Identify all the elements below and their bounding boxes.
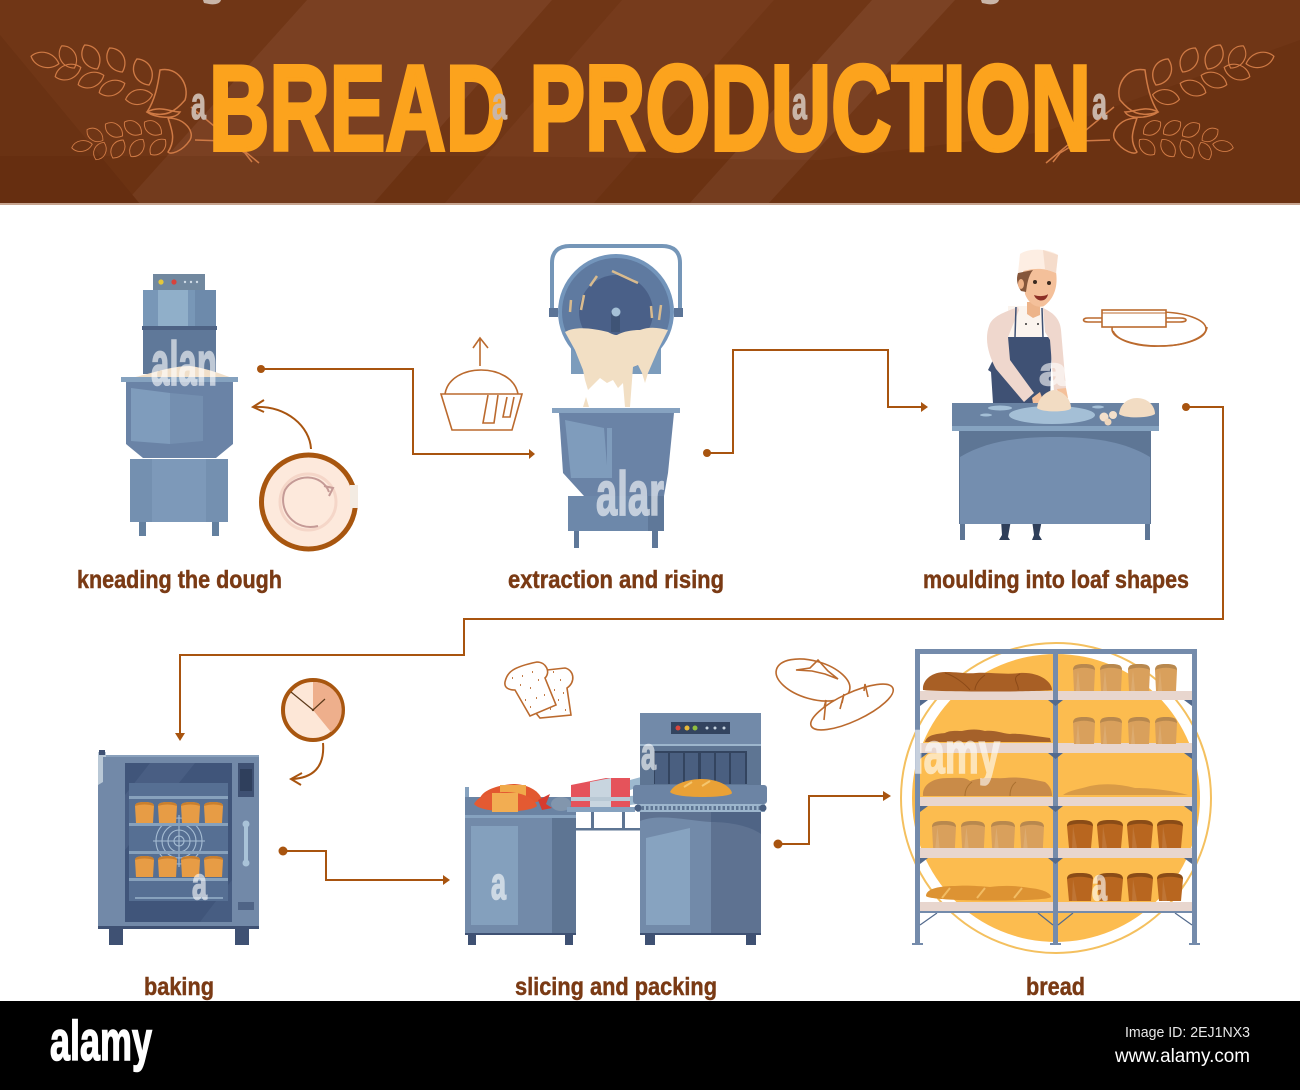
watermarks on rack [913,721,1108,910]
icon: loaf and baguette [771,651,899,739]
header banner [0,0,1300,205]
icon: rotation dial with arrow [253,400,358,549]
packed loaves [474,784,571,812]
slicing machine [633,713,767,945]
icon: wheat left [29,41,259,163]
watermark fragments in header [191,0,1107,129]
rack frame [912,649,1200,945]
connector: extraction to moulding [703,350,928,457]
watermark fragments in header: a [1092,77,1107,129]
watermark fragments in header: a [191,77,206,129]
icon: bread slices [505,662,573,718]
label: slicing and packing: slicing and packing [515,973,717,1001]
work table [952,403,1159,540]
step 3: baker at table: a [1039,350,1068,394]
left cabinet [465,787,576,945]
watermarks on rack: lamy [913,721,1000,786]
step 4: oven [98,750,259,945]
label: bread: bread [1026,973,1085,1001]
baker body [987,250,1068,409]
icon: rolling pin and board [1084,310,1207,346]
connector: slicing to bread [774,791,891,848]
watermarks on rack: a [1092,859,1108,910]
connector: baking to slicing [278,846,450,885]
watermark fragments in header: a [492,77,507,129]
step 2: extraction machine [549,246,683,548]
connector: kneading to extraction [257,365,535,459]
breads row 4 [932,820,1183,848]
connector: moulding to baking [175,403,1223,741]
step 6: bread rack [901,643,1211,953]
dough [1037,390,1155,426]
baker legs [999,520,1042,540]
label: baking: baking [144,973,214,1001]
breads row 3 [923,777,1188,796]
icon: clock with arrow [283,680,343,785]
footer site url: www.alamy.com [1114,1046,1250,1067]
step 1: kneading machine: alan [151,330,217,399]
label: kneading the dough: kneading the dough [77,566,282,594]
step 1: kneading machine [121,274,238,536]
footer image id: Image ID: 2EJ1NX3 [1125,1024,1250,1041]
breads row 5 [926,873,1183,901]
slicing machine: a [641,728,657,779]
step 4: oven: a [192,858,208,909]
conveyor [633,785,767,804]
footer bar [0,1001,1300,1090]
watermark fragments in header: a [792,77,807,129]
icon: wheat right [1046,41,1276,163]
breads row 2 [925,717,1177,744]
step 5: slicing and packing machines [465,713,767,945]
central conveyor with packed bread [567,776,645,830]
icon: risen dough [441,338,522,430]
left cabinet: a [491,858,507,909]
label: moulding into loaf shapes: moulding into loaf shapes [923,566,1189,594]
step 3: baker at table [952,250,1159,540]
footer logo: alamy [50,1009,152,1072]
breads row 1 [923,664,1177,692]
yellow circle backdrop [901,643,1211,953]
shelves [920,691,1192,911]
label: extraction and rising: extraction and rising [508,566,724,594]
step 2: extraction machine: alar [596,460,664,529]
baguette on conveyor [670,779,732,797]
